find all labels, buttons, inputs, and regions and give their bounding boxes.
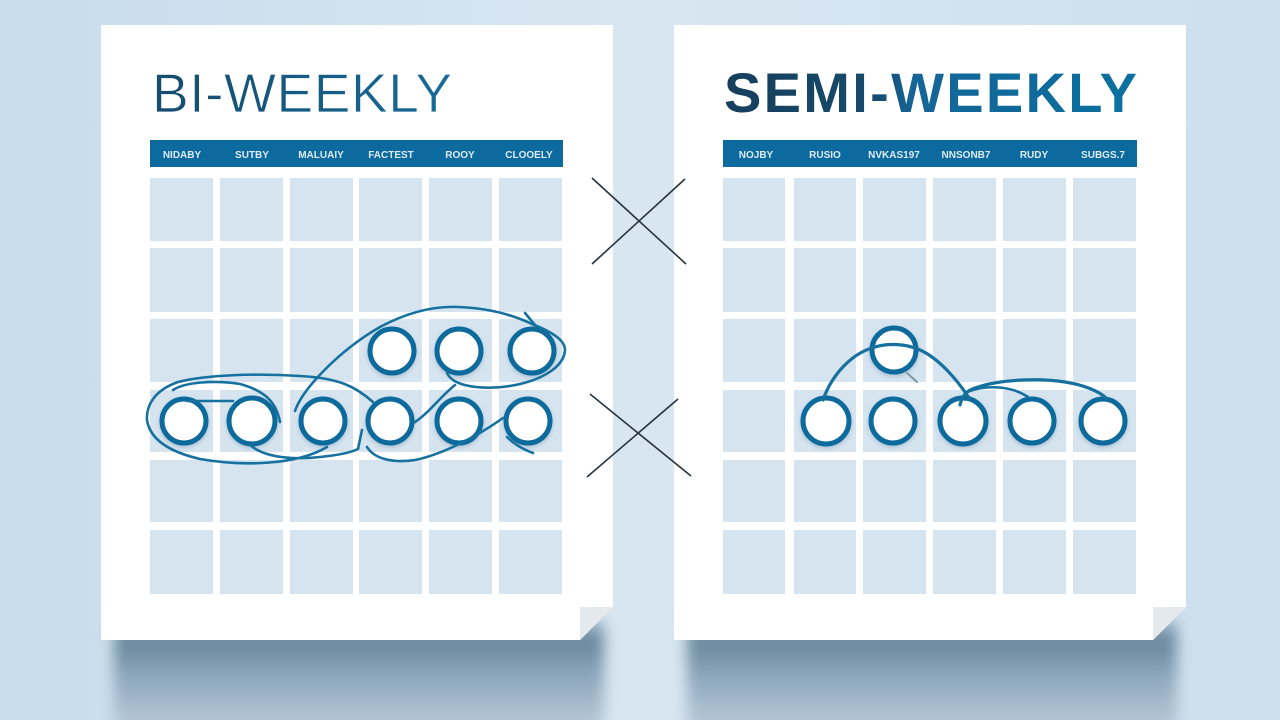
folded corner: [1153, 607, 1186, 640]
weekday header bar: NIDABY: [163, 150, 201, 161]
folded corner: [580, 607, 613, 640]
date circles: [803, 328, 1125, 444]
icon: lower cross mark: [587, 394, 691, 477]
shadow under left page: [114, 620, 604, 720]
page sheet with folded corner: [674, 25, 1186, 640]
weekday header bar: [723, 140, 1137, 167]
shadow under right page: [687, 620, 1177, 720]
weekday header bar: FACTEST: [368, 150, 414, 161]
weekday header bar: NOJBY: [739, 150, 774, 161]
date circles: [162, 329, 554, 444]
weekday header bar: CLOOELY: [505, 150, 553, 161]
weekday header bar: NNSONB7: [942, 150, 991, 161]
weekday header bar: ROOY: [445, 150, 475, 161]
panel: bi-weekly calendar page: [101, 25, 613, 640]
weekday header bar: MALUAIY: [298, 150, 344, 161]
icon: upper cross mark: [592, 178, 686, 264]
heading: bi-weekly: BI-WEEKLY: [152, 62, 452, 124]
connecting arcs: [823, 344, 1106, 405]
weekday header bar: NVKAS197: [868, 150, 920, 161]
weekday header bar: RUDY: [1020, 150, 1048, 161]
weekday header bar: [150, 140, 563, 167]
panel: semi-weekly calendar page: [674, 25, 1186, 640]
weekday header bar: RUSIO: [809, 150, 841, 161]
calendar grid: [723, 178, 1136, 594]
weekday header bar: SUTBY: [235, 150, 269, 161]
weekday header bar: SUBGS.7: [1081, 150, 1125, 161]
calendar grid: [150, 178, 562, 594]
page sheet with folded corner: [101, 25, 613, 640]
heading: semi-weekly: SEMI-WEEKLY: [724, 61, 1137, 124]
connecting arcs: [147, 307, 565, 463]
